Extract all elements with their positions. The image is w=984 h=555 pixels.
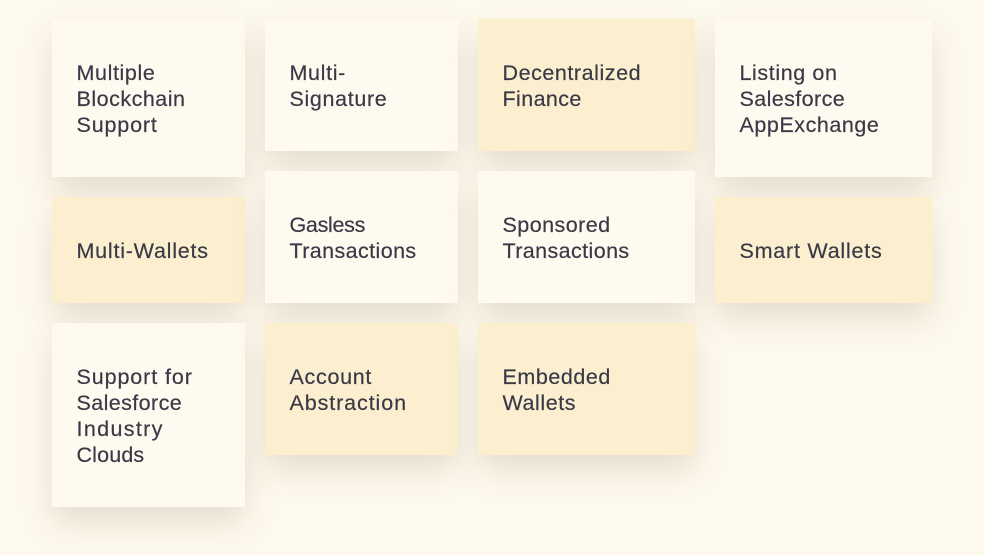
card: Support for Salesforce Industry Clouds: Clouds bbox=[76, 443, 144, 467]
card: Multi-Signature: Multi- bbox=[290, 61, 346, 85]
card: Account Abstraction: Account bbox=[290, 365, 372, 389]
card: Sponsored Transactions bbox=[478, 171, 695, 303]
card: Multi-Signature bbox=[265, 19, 458, 151]
card: Gasless Transactions: Transactions bbox=[290, 239, 417, 263]
card: Multi-Signature: Signature bbox=[290, 87, 387, 111]
card: Sponsored Transactions: Sponsored bbox=[502, 213, 611, 237]
card: Support for Salesforce Industry Clouds: Industry bbox=[76, 417, 164, 441]
card: Multi-Wallets bbox=[52, 197, 245, 303]
card: Multiple Blockchain Support: Blockchain bbox=[76, 87, 185, 111]
card: Multiple Blockchain Support: Multiple bbox=[76, 61, 155, 85]
card: Multi-Wallets: Multi-Wallets bbox=[76, 239, 209, 263]
card: Smart Wallets: Smart Wallets bbox=[740, 239, 883, 263]
card: Decentralized Finance: Decentralized bbox=[502, 61, 641, 85]
card: Listing on Salesforce AppExchange: Salesforce bbox=[740, 87, 845, 111]
card: Embedded Wallets bbox=[478, 323, 695, 455]
card: Account Abstraction: Abstraction bbox=[290, 391, 407, 415]
card: Gasless Transactions bbox=[265, 171, 458, 303]
card: Account Abstraction bbox=[265, 323, 458, 455]
card: Listing on Salesforce AppExchange: Listing on bbox=[740, 61, 838, 85]
card: Support for Salesforce Industry Clouds: Support for bbox=[76, 365, 193, 389]
card: Support for Salesforce Industry Clouds: Salesforce bbox=[76, 391, 182, 415]
card: Multiple Blockchain Support bbox=[52, 19, 245, 177]
card: Decentralized Finance bbox=[478, 19, 695, 151]
card: Multiple Blockchain Support: Support bbox=[76, 113, 158, 137]
card: Decentralized Finance: Finance bbox=[502, 87, 582, 111]
card: Sponsored Transactions: Transactions bbox=[502, 239, 630, 263]
card: Support for Salesforce Industry Clouds bbox=[52, 323, 245, 507]
card: Smart Wallets bbox=[715, 197, 932, 303]
card: Embedded Wallets: Embedded bbox=[502, 365, 611, 389]
card: Listing on Salesforce AppExchange: AppExchange bbox=[740, 113, 879, 137]
card: Embedded Wallets: Wallets bbox=[502, 391, 576, 415]
card: Listing on Salesforce AppExchange bbox=[715, 19, 932, 177]
card: Gasless Transactions: Gasless bbox=[290, 213, 365, 237]
